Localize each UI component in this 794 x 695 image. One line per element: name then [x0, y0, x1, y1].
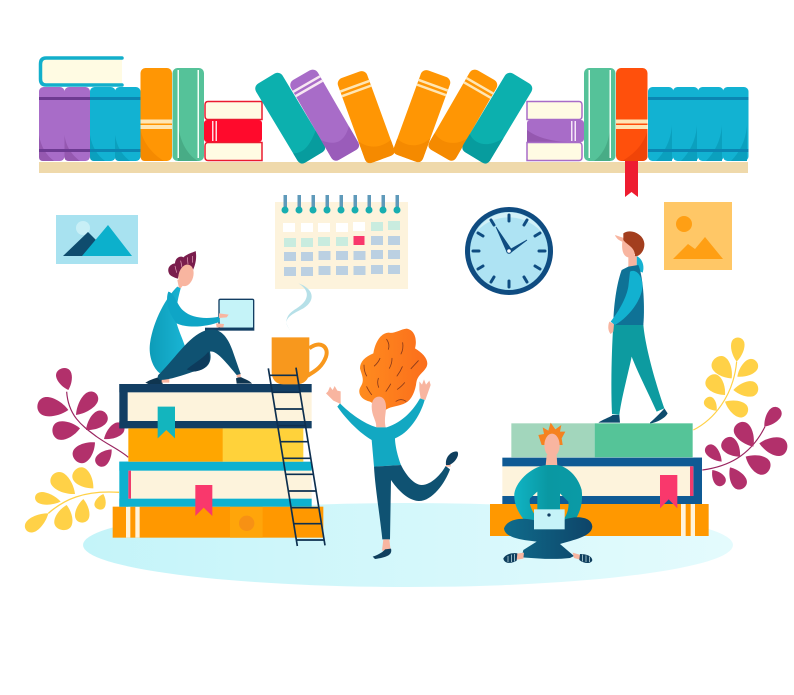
wall clock: [468, 210, 550, 292]
trousers: [374, 465, 450, 539]
hand: [608, 322, 614, 334]
neck: [177, 277, 185, 290]
pink bookmark: [195, 485, 212, 516]
arm: [611, 271, 642, 325]
top: [337, 398, 425, 467]
lying teal book: [40, 58, 122, 85]
bookshelf board: [39, 162, 748, 173]
tilted teal book: [253, 71, 327, 165]
hair: [359, 329, 427, 411]
purple stacked books: [527, 102, 584, 160]
green upright book 2: [584, 68, 616, 161]
floor ellipse: [83, 503, 733, 587]
face and neck: [372, 397, 386, 427]
hair: [538, 423, 565, 445]
yellow plant left: [22, 464, 119, 535]
hair strands: [364, 339, 418, 401]
tilted orange book 1: [336, 69, 396, 165]
shoes: [145, 377, 252, 384]
steam: [286, 283, 312, 332]
crossed legs: [504, 517, 592, 559]
pink bookmark right: [660, 475, 677, 508]
face: [615, 235, 637, 257]
face: [176, 263, 196, 288]
sweater: [150, 287, 187, 373]
face: [544, 434, 560, 457]
arm: [167, 292, 220, 327]
orange upright book: [140, 68, 172, 161]
sweater: [514, 465, 582, 528]
hood: [637, 256, 643, 273]
coffee mug: [272, 337, 327, 384]
shoes: [373, 452, 458, 559]
plants and left book stack: [22, 251, 327, 546]
navy cover book: [119, 384, 312, 428]
green upright book: [172, 68, 204, 161]
dancing woman: [326, 329, 458, 559]
neck: [546, 455, 557, 466]
person with laptop on books: [145, 251, 254, 384]
teal bookmark: [158, 407, 175, 438]
teal cover book: [119, 462, 312, 507]
ladder: [268, 368, 325, 546]
orange book right: [490, 504, 709, 536]
purple books left: [39, 87, 90, 161]
teal books right: [648, 87, 748, 161]
calendar rings: [282, 195, 400, 214]
red bookmark: [625, 160, 638, 197]
laptop: [205, 299, 254, 331]
bottom orange book: [113, 507, 323, 538]
torso: [613, 265, 644, 325]
feet: [382, 462, 451, 551]
red-orange book: [616, 68, 648, 161]
hair: [623, 231, 644, 256]
picture frame right: [664, 202, 732, 270]
clock hands: [496, 227, 527, 253]
yellow plant right: [693, 337, 761, 430]
feet: [514, 553, 582, 560]
hands: [326, 379, 431, 404]
clock ticks: [473, 215, 545, 287]
knee shade: [187, 352, 210, 372]
trousers: [158, 330, 241, 380]
red stacked books: [204, 102, 262, 160]
trousers: [611, 324, 664, 415]
laptop: [534, 509, 565, 529]
sitting boy: [503, 423, 592, 563]
hands: [216, 313, 229, 327]
navy book right: [502, 458, 702, 504]
green book: [511, 423, 693, 457]
tilted orange book 2: [392, 68, 452, 164]
tilted teal book 2: [461, 71, 534, 165]
sandals: [503, 553, 592, 563]
picture frame left: [56, 215, 138, 264]
yellow and orange book: [128, 428, 303, 462]
tilted orange book 3: [427, 67, 499, 163]
calendar date grid: [283, 221, 400, 276]
hair: [168, 251, 196, 279]
shoes: [599, 408, 668, 423]
neck: [628, 255, 637, 268]
right side scene: [490, 231, 789, 563]
teal books left: [90, 87, 140, 161]
maroon plant left: [36, 366, 128, 469]
tilted purple book: [288, 67, 361, 163]
walking man: [599, 231, 668, 423]
calendar: [275, 195, 408, 289]
maroon plant right: [702, 404, 789, 492]
